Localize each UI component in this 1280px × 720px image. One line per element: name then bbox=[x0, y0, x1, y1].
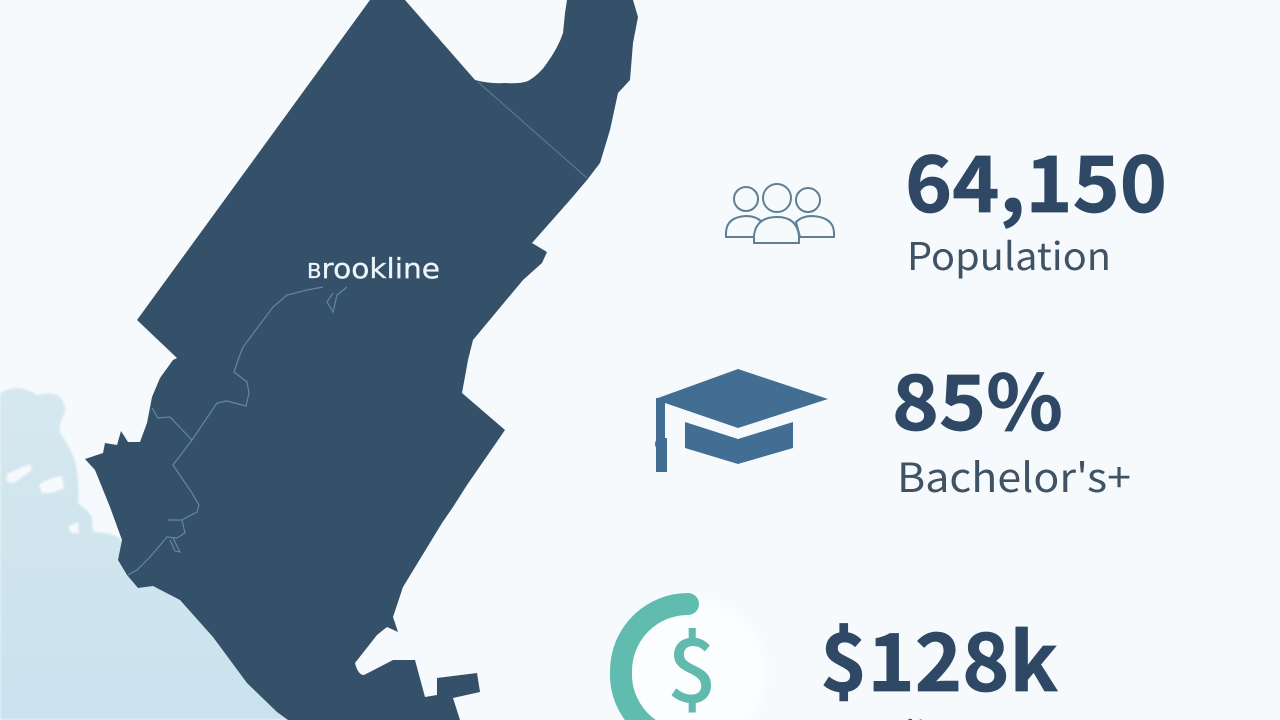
boundary: winding internal lines bbox=[128, 287, 347, 575]
label: Bachelor's+ bbox=[897, 446, 1131, 504]
value: 64,150 bbox=[905, 123, 1167, 235]
label: Population bbox=[907, 226, 1111, 281]
stat: population bbox=[726, 123, 1167, 281]
icon: dollar ring bbox=[610, 590, 774, 720]
stat: education bbox=[655, 342, 1131, 504]
map label: Brookline bbox=[307, 252, 440, 285]
sea: light blue water area bbox=[0, 388, 300, 720]
icon: people bbox=[726, 184, 834, 243]
stat: income bbox=[610, 590, 1111, 720]
boundary: northeast straight line bbox=[478, 82, 587, 178]
icon: graduation cap bbox=[655, 369, 828, 472]
value: $128k bbox=[820, 599, 1058, 715]
map: Brookline silhouette bbox=[85, 0, 638, 720]
value: 85% bbox=[892, 342, 1063, 452]
